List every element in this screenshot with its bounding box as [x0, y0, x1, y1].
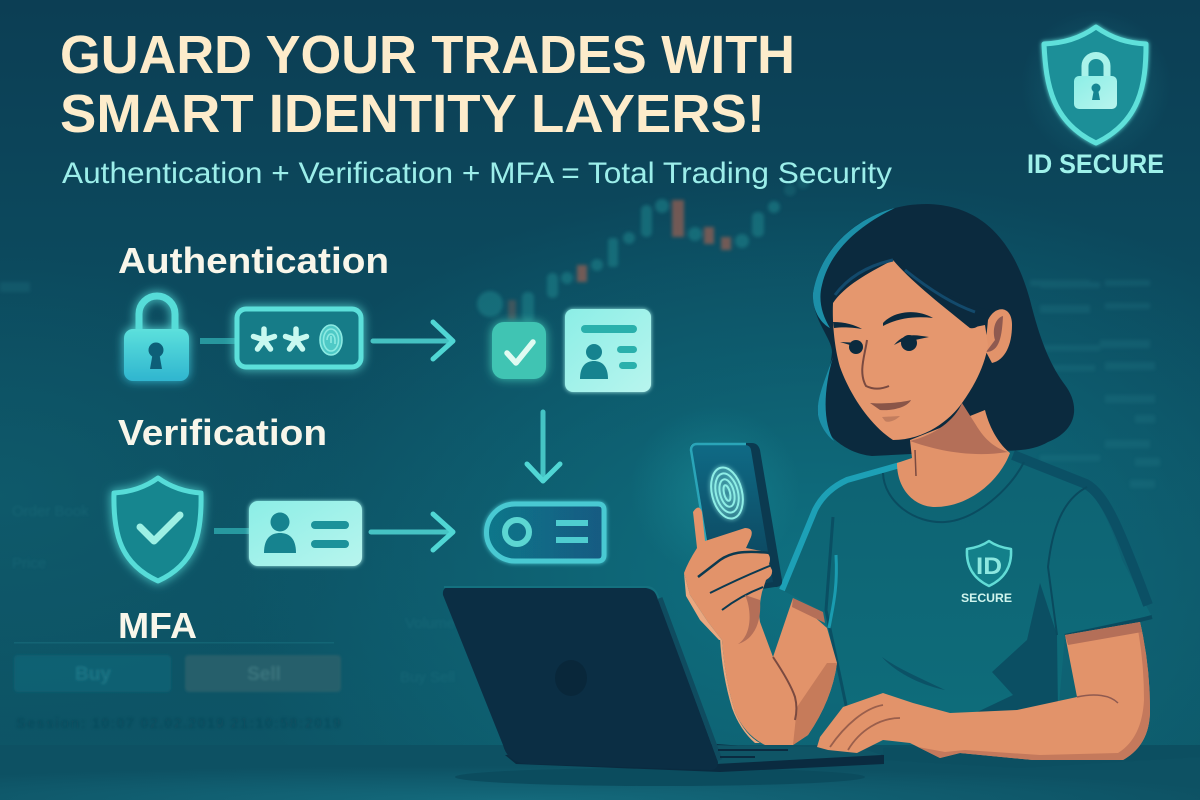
ear — [985, 309, 1012, 363]
table surface — [0, 745, 1200, 800]
ghost trading panel: Buy Sell — [400, 669, 455, 686]
arrow down — [527, 412, 560, 481]
neck shadow — [910, 403, 1008, 454]
buy button: Buy — [75, 664, 111, 685]
phone glow — [630, 405, 800, 575]
eyes — [840, 335, 929, 354]
icon: padlock — [124, 296, 189, 381]
left arm and hand — [684, 508, 837, 745]
ghost trading panel: Volume — [405, 615, 455, 632]
eyebrows — [833, 312, 933, 329]
heading: authentication: Authentication — [118, 240, 389, 281]
sell button — [185, 655, 341, 692]
padlock — [1074, 56, 1117, 109]
laptop base — [505, 744, 884, 772]
neck — [897, 410, 1010, 507]
arrow — [373, 322, 453, 359]
asterisk stars — [254, 329, 306, 349]
fingerprint — [320, 325, 342, 355]
laptop logo — [555, 660, 587, 696]
icon: toggle card — [486, 504, 604, 561]
shield — [1044, 27, 1146, 143]
sell button: Sell — [247, 664, 281, 685]
title: SMART IDENTITY LAYERS! — [60, 84, 765, 144]
buy button — [14, 655, 171, 692]
connector — [214, 528, 249, 534]
hair strands — [893, 260, 990, 328]
phone — [690, 443, 782, 595]
ghost session line: Session: 10:07 02.02.2019 21:10:58:2019 — [16, 715, 341, 732]
ghost trading panel — [12, 503, 455, 732]
logo: shirt badge: SECURE — [961, 591, 1012, 605]
icon: check tile — [492, 322, 546, 379]
icon: id card — [565, 309, 651, 392]
heading: verification: Verification — [118, 412, 327, 453]
arrow — [371, 514, 453, 550]
face — [833, 260, 988, 440]
id secure badge — [1021, 10, 1171, 179]
ghost candlestick chart — [477, 177, 809, 322]
hair rim light — [813, 208, 895, 441]
logo: shirt badge — [961, 541, 1012, 605]
ghost trading panel: Price — [12, 555, 46, 572]
badge text: ID SECURE — [1027, 149, 1164, 179]
shirt rim and seams — [782, 455, 1152, 710]
laptop — [443, 587, 884, 786]
icon: profile card — [249, 501, 362, 566]
title: GUARD YOUR TRADES WITH — [60, 25, 795, 85]
person — [630, 204, 1152, 715]
shirt — [782, 453, 1152, 715]
icon: fingerprint — [706, 464, 748, 522]
heading: mfa: MFA — [118, 605, 197, 646]
title — [60, 25, 795, 144]
connector — [200, 338, 235, 344]
subtitle: Authentication + Verification + MFA = Total Trading Security — [62, 157, 892, 190]
nose — [862, 340, 889, 389]
ghost order book columns — [0, 280, 1160, 488]
shirt fold — [973, 583, 1058, 714]
laptop lid — [443, 587, 718, 770]
right arm and hand — [817, 622, 1150, 760]
hair back — [813, 204, 1074, 456]
icon: shield check — [114, 478, 201, 581]
icon: password field — [237, 309, 361, 367]
collar — [883, 462, 1024, 522]
ghost trading panel: Order Book — [12, 503, 89, 520]
laptop shadow — [455, 768, 865, 786]
mouth — [870, 400, 911, 410]
logo: shirt badge: ID — [976, 553, 1002, 580]
